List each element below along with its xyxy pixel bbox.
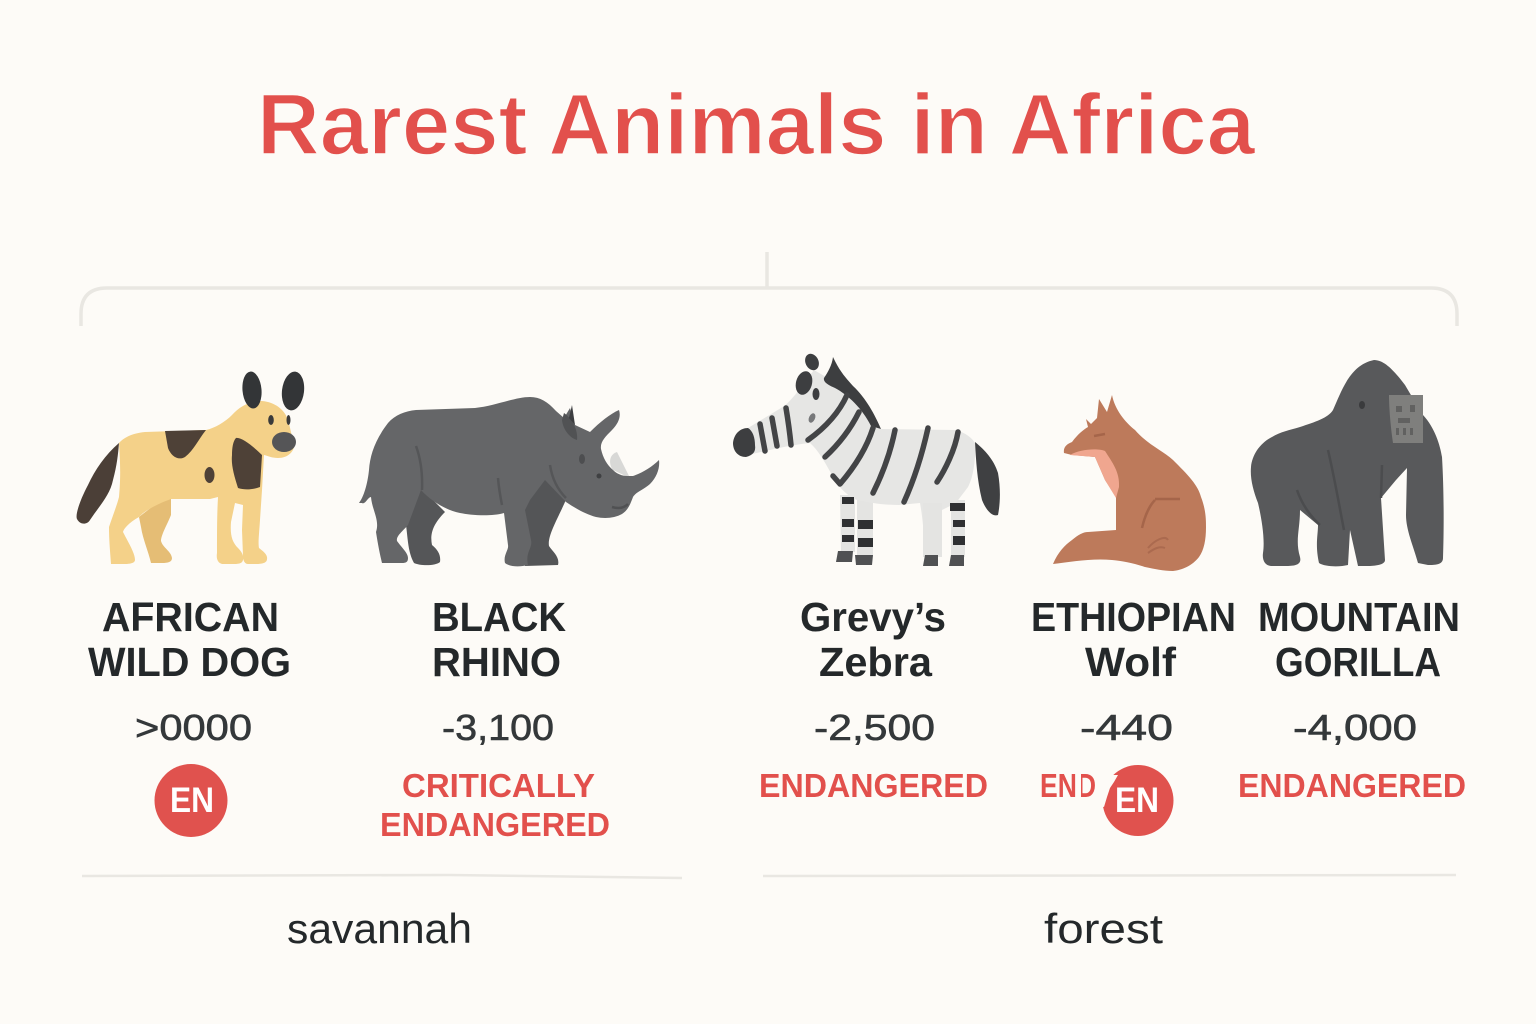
animal: African wild dog [77,370,306,564]
label: African wild dog: AFRICAN [102,594,279,640]
status: wolf endangered, partly covered: END [1040,767,1096,804]
label: Grevy's zebra: Zebra [819,639,933,685]
count: zebra: -2,500 [814,707,935,748]
divider: savannah [82,875,682,878]
animal: Ethiopian wolf [1053,395,1206,571]
label: mountain gorilla: MOUNTAIN [1258,594,1460,640]
label: mountain gorilla: GORILLA [1275,639,1441,685]
label: Grevy's zebra: Grevy’s [800,594,946,640]
label: African wild dog: WILD DOG [88,639,291,685]
count: wolf: -440 [1080,707,1173,748]
badge: wild dog EN [154,764,228,837]
count: wild dog: >0000 [135,707,252,748]
label: black rhino: BLACK [432,594,566,640]
label: Ethiopian wolf [1031,594,1236,685]
status: gorilla endangered: ENDANGERED [1238,767,1466,804]
label: Grevy's zebra [800,594,946,685]
label: African wild dog [88,594,291,685]
badge: wolf EN: EN [1115,781,1159,820]
status: rhino critically endangered: ENDANGERED [380,806,610,843]
animal: black rhino [359,397,659,566]
divider: forest [763,875,1456,876]
habitat label: forest: forest [1044,905,1163,952]
status: rhino critically endangered: CRITICALLY [402,767,595,804]
status cover: gap in clipped D [1076,770,1081,800]
title: Rarest Animals in Africa [257,77,1256,173]
status: rhino critically endangered [380,767,610,843]
label: Ethiopian wolf: ETHIOPIAN [1031,594,1236,640]
badge: wolf EN [1100,765,1174,836]
label: mountain gorilla [1258,594,1460,685]
count: gorilla: -4,000 [1293,707,1417,748]
label: black rhino: RHINO [432,639,561,685]
label: Ethiopian wolf: Wolf [1085,639,1176,685]
animal: Grevy's zebra [733,352,1000,566]
status: zebra endangered: ENDANGERED [759,767,988,804]
habitat label: savannah: savannah [287,905,472,952]
badge: wild dog EN: EN [170,781,214,820]
bracket connector [81,252,1457,326]
animal: mountain gorilla [1251,360,1444,566]
count: rhino: -3,100 [442,707,554,748]
label: black rhino [432,594,566,685]
